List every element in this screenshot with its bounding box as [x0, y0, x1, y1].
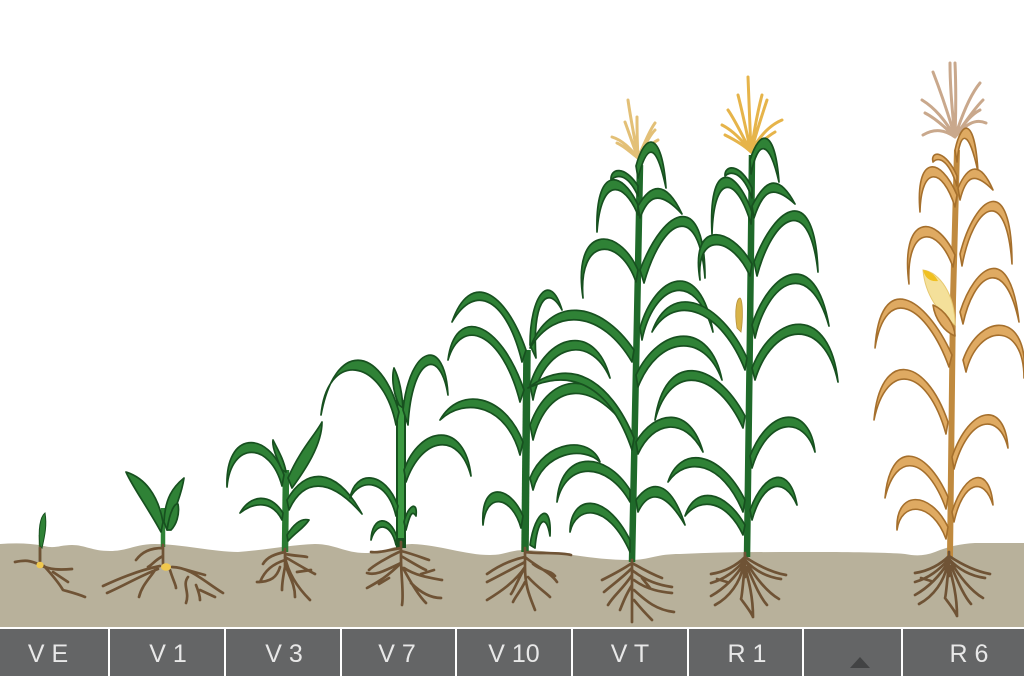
V10 leaves — [440, 290, 633, 548]
cell: V1: V 1 — [149, 640, 187, 668]
plant: V7 — [321, 355, 471, 605]
soil ground band — [0, 543, 1024, 627]
V10 stem — [525, 350, 527, 552]
cell: R1 — [689, 629, 802, 676]
plant: R1 — [652, 77, 838, 617]
VE leaf — [39, 513, 46, 548]
R1 stem — [747, 155, 752, 557]
VE stem — [39, 535, 41, 561]
cell: arrow marker — [804, 629, 901, 676]
VT tassel — [612, 100, 658, 158]
V3 roots — [257, 549, 315, 600]
V7 stem — [396, 400, 406, 548]
VT roots — [602, 560, 674, 622]
V1 roots — [103, 545, 223, 603]
V1 stem — [161, 508, 165, 547]
R1 roots — [711, 553, 786, 617]
cell: V10: V 10 — [488, 640, 540, 668]
plant: V10 — [440, 290, 633, 610]
V10 roots — [487, 548, 571, 610]
VE roots — [15, 548, 85, 597]
R6 stem — [950, 150, 957, 557]
cell: R6: R 6 — [950, 640, 988, 668]
cell: VT: V T — [611, 640, 649, 668]
V3 leaves — [227, 422, 362, 541]
plant: VE seedling — [15, 513, 85, 597]
VE seed — [36, 562, 44, 568]
V3 stem — [285, 470, 286, 552]
cell: V3: V 3 — [265, 640, 303, 668]
cell: V3 — [226, 629, 340, 676]
R1 leaves — [652, 138, 838, 535]
plant: VT — [528, 100, 722, 622]
plant: V1 — [103, 472, 223, 603]
cell: R1: R 1 — [728, 640, 766, 668]
cell: V7: V 7 — [378, 640, 416, 668]
cell: VE — [0, 629, 108, 676]
V7 stem highlight — [398, 400, 404, 538]
plant: V3 — [227, 422, 362, 600]
R6 ear — [923, 270, 955, 325]
R6 tassel — [922, 63, 986, 137]
R6 roots — [915, 552, 990, 616]
R6 leaves — [874, 128, 1024, 539]
plant: R6 dried — [874, 63, 1024, 616]
V1 seed — [161, 563, 171, 571]
cell: V7 — [342, 629, 455, 676]
R1 ear — [736, 298, 742, 332]
cell: VT — [573, 629, 687, 676]
stage label bar — [0, 629, 1024, 676]
R1 tassel — [722, 77, 782, 152]
cell: R6 — [903, 629, 1024, 676]
V7 roots — [367, 542, 442, 605]
cell: V1 — [110, 629, 224, 676]
VT leaves — [528, 142, 722, 552]
cell: V10 — [457, 629, 571, 676]
cell: VE: V E — [28, 640, 68, 668]
R6 ear tip — [923, 270, 938, 281]
VT stem — [632, 165, 640, 562]
V1 leaves — [126, 472, 184, 532]
V7 leaves — [321, 355, 471, 545]
